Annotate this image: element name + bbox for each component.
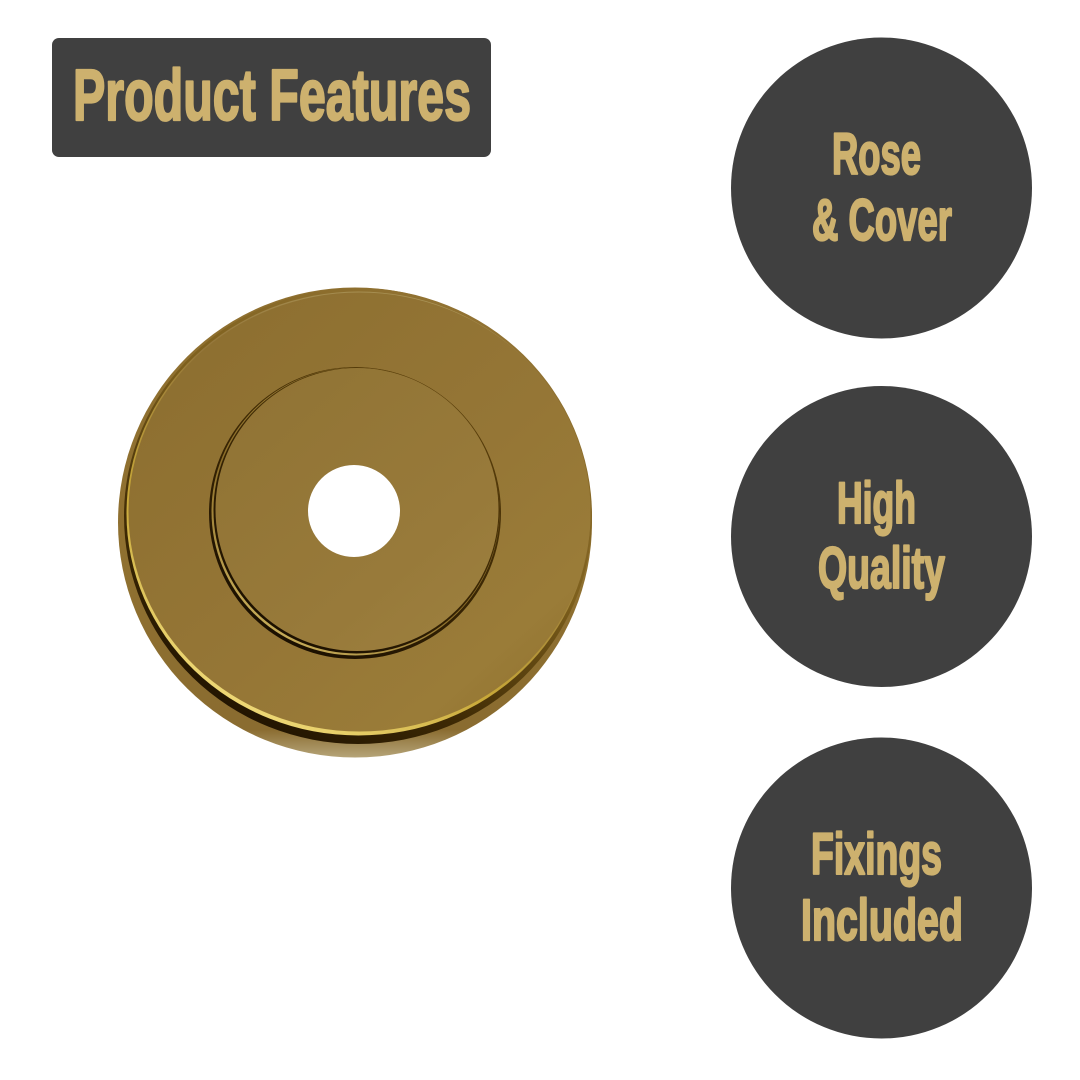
inner boss dark ring xyxy=(214,368,500,654)
feature badge: rose and cover xyxy=(731,38,1032,338)
badge circle xyxy=(731,386,1032,687)
inner boss face xyxy=(216,368,498,651)
badge circle xyxy=(731,38,1032,338)
badge text line 1: High xyxy=(837,471,916,536)
centre hole xyxy=(308,465,400,557)
banner background xyxy=(52,38,491,157)
badge text line 1: Rose xyxy=(832,122,921,187)
title banner xyxy=(52,38,491,157)
title text: Product Features xyxy=(73,56,471,136)
disc face xyxy=(128,292,590,732)
badge text line 2: Included xyxy=(801,888,963,953)
badge circle xyxy=(731,738,1032,1038)
rim highlight xyxy=(126,292,590,736)
inner boss highlight ring xyxy=(212,368,500,656)
badge text line 2: Quality xyxy=(818,536,945,601)
badge text line 2: & Cover xyxy=(812,188,952,253)
disc side wall xyxy=(118,288,592,758)
outer rim dark band xyxy=(124,288,592,744)
inner boss shadow ring xyxy=(209,367,501,659)
badge text line 1: Fixings xyxy=(811,822,942,887)
product image: brass rose plate xyxy=(118,288,592,758)
feature badge: fixings included xyxy=(731,738,1032,1038)
feature badge: high quality xyxy=(731,386,1032,687)
